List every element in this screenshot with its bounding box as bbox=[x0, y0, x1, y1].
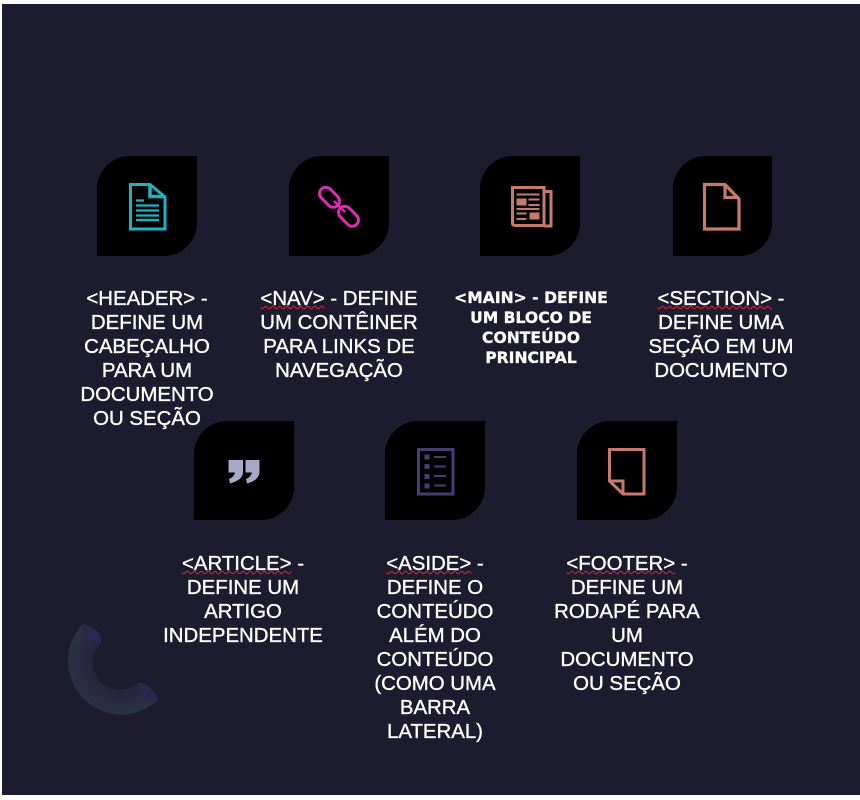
panel: icon tile nav bbox=[289, 156, 389, 256]
text: footer bbox=[554, 553, 700, 695]
text: aside: <ASIDE> - bbox=[386, 553, 484, 575]
text: section: <SECTION> - bbox=[658, 288, 784, 310]
text: aside: DEFINE O bbox=[387, 577, 483, 599]
text: header: <HEADER> - bbox=[86, 288, 208, 310]
icon: document with lines bbox=[130, 184, 165, 229]
icon: quotation marks bbox=[228, 460, 260, 484]
text: header: DEFINE UM bbox=[91, 312, 203, 334]
text: footer: OU SEÇÃO bbox=[573, 673, 681, 695]
text: aside: BARRA bbox=[400, 697, 470, 719]
text: header: DOCUMENTO bbox=[80, 384, 214, 406]
text: article: INDEPENDENTE bbox=[163, 625, 323, 647]
panel: icon tile aside bbox=[385, 421, 485, 520]
text: nav: UM CONTÊINER bbox=[260, 312, 418, 334]
text: main: PRINCIPAL bbox=[485, 349, 577, 367]
text: aside: CONTEÚDO bbox=[377, 601, 493, 623]
text: article: ARTIGO bbox=[204, 601, 282, 623]
panel: icon tile footer bbox=[577, 421, 677, 520]
decorative arc shape bbox=[68, 625, 158, 714]
panel: icon tile article bbox=[194, 421, 294, 520]
text: article: DEFINE UM bbox=[187, 577, 299, 599]
text: aside: CONTEÚDO bbox=[377, 649, 493, 671]
icon: page with folded corner bbox=[610, 450, 644, 494]
text: main: <MAIN> - DEFINE bbox=[454, 289, 608, 307]
panel: icon tile main bbox=[480, 156, 580, 256]
text: header: PARA UM bbox=[102, 360, 192, 382]
text: main bbox=[454, 289, 608, 367]
text: aside: (COMO UMA bbox=[374, 673, 496, 695]
text: footer: <FOOTER> - bbox=[566, 553, 688, 575]
text: article: <ARTICLE> - bbox=[182, 553, 304, 575]
icon: blank page bbox=[704, 184, 739, 229]
text: nav: PARA LINKS DE bbox=[263, 336, 415, 358]
icon: chain link bbox=[317, 185, 361, 229]
text: aside: ALÉM DO bbox=[389, 625, 481, 647]
text: header: OU SEÇÃO bbox=[93, 408, 201, 430]
panel: icon tile section bbox=[673, 156, 772, 256]
text: header bbox=[80, 288, 214, 430]
text: aside bbox=[374, 553, 496, 743]
text: footer: DOCUMENTO bbox=[560, 649, 694, 671]
icon: newspaper bbox=[512, 188, 551, 226]
text: header: CABEÇALHO bbox=[84, 336, 210, 358]
text: footer: RODAPÉ PARA bbox=[554, 601, 700, 623]
icon: list document bbox=[418, 450, 453, 494]
text: section: DEFINE UMA bbox=[658, 312, 784, 334]
text: section: SEÇÃO EM UM bbox=[648, 336, 794, 358]
text: nav: <NAV> - DEFINE bbox=[260, 288, 418, 310]
text: nav bbox=[260, 288, 418, 382]
text: aside: LATERAL) bbox=[387, 721, 483, 743]
panel: icon tile header bbox=[97, 156, 197, 256]
text: article bbox=[163, 553, 323, 647]
text: section: DOCUMENTO bbox=[654, 360, 788, 382]
text: footer: UM bbox=[611, 625, 643, 647]
text: nav: NAVEGAÇÃO bbox=[275, 360, 403, 382]
text: main: UM BLOCO DE bbox=[470, 309, 592, 327]
text: footer: DEFINE UM bbox=[571, 577, 683, 599]
text: main: CONTEÚDO bbox=[482, 329, 580, 347]
text: section bbox=[648, 288, 794, 382]
